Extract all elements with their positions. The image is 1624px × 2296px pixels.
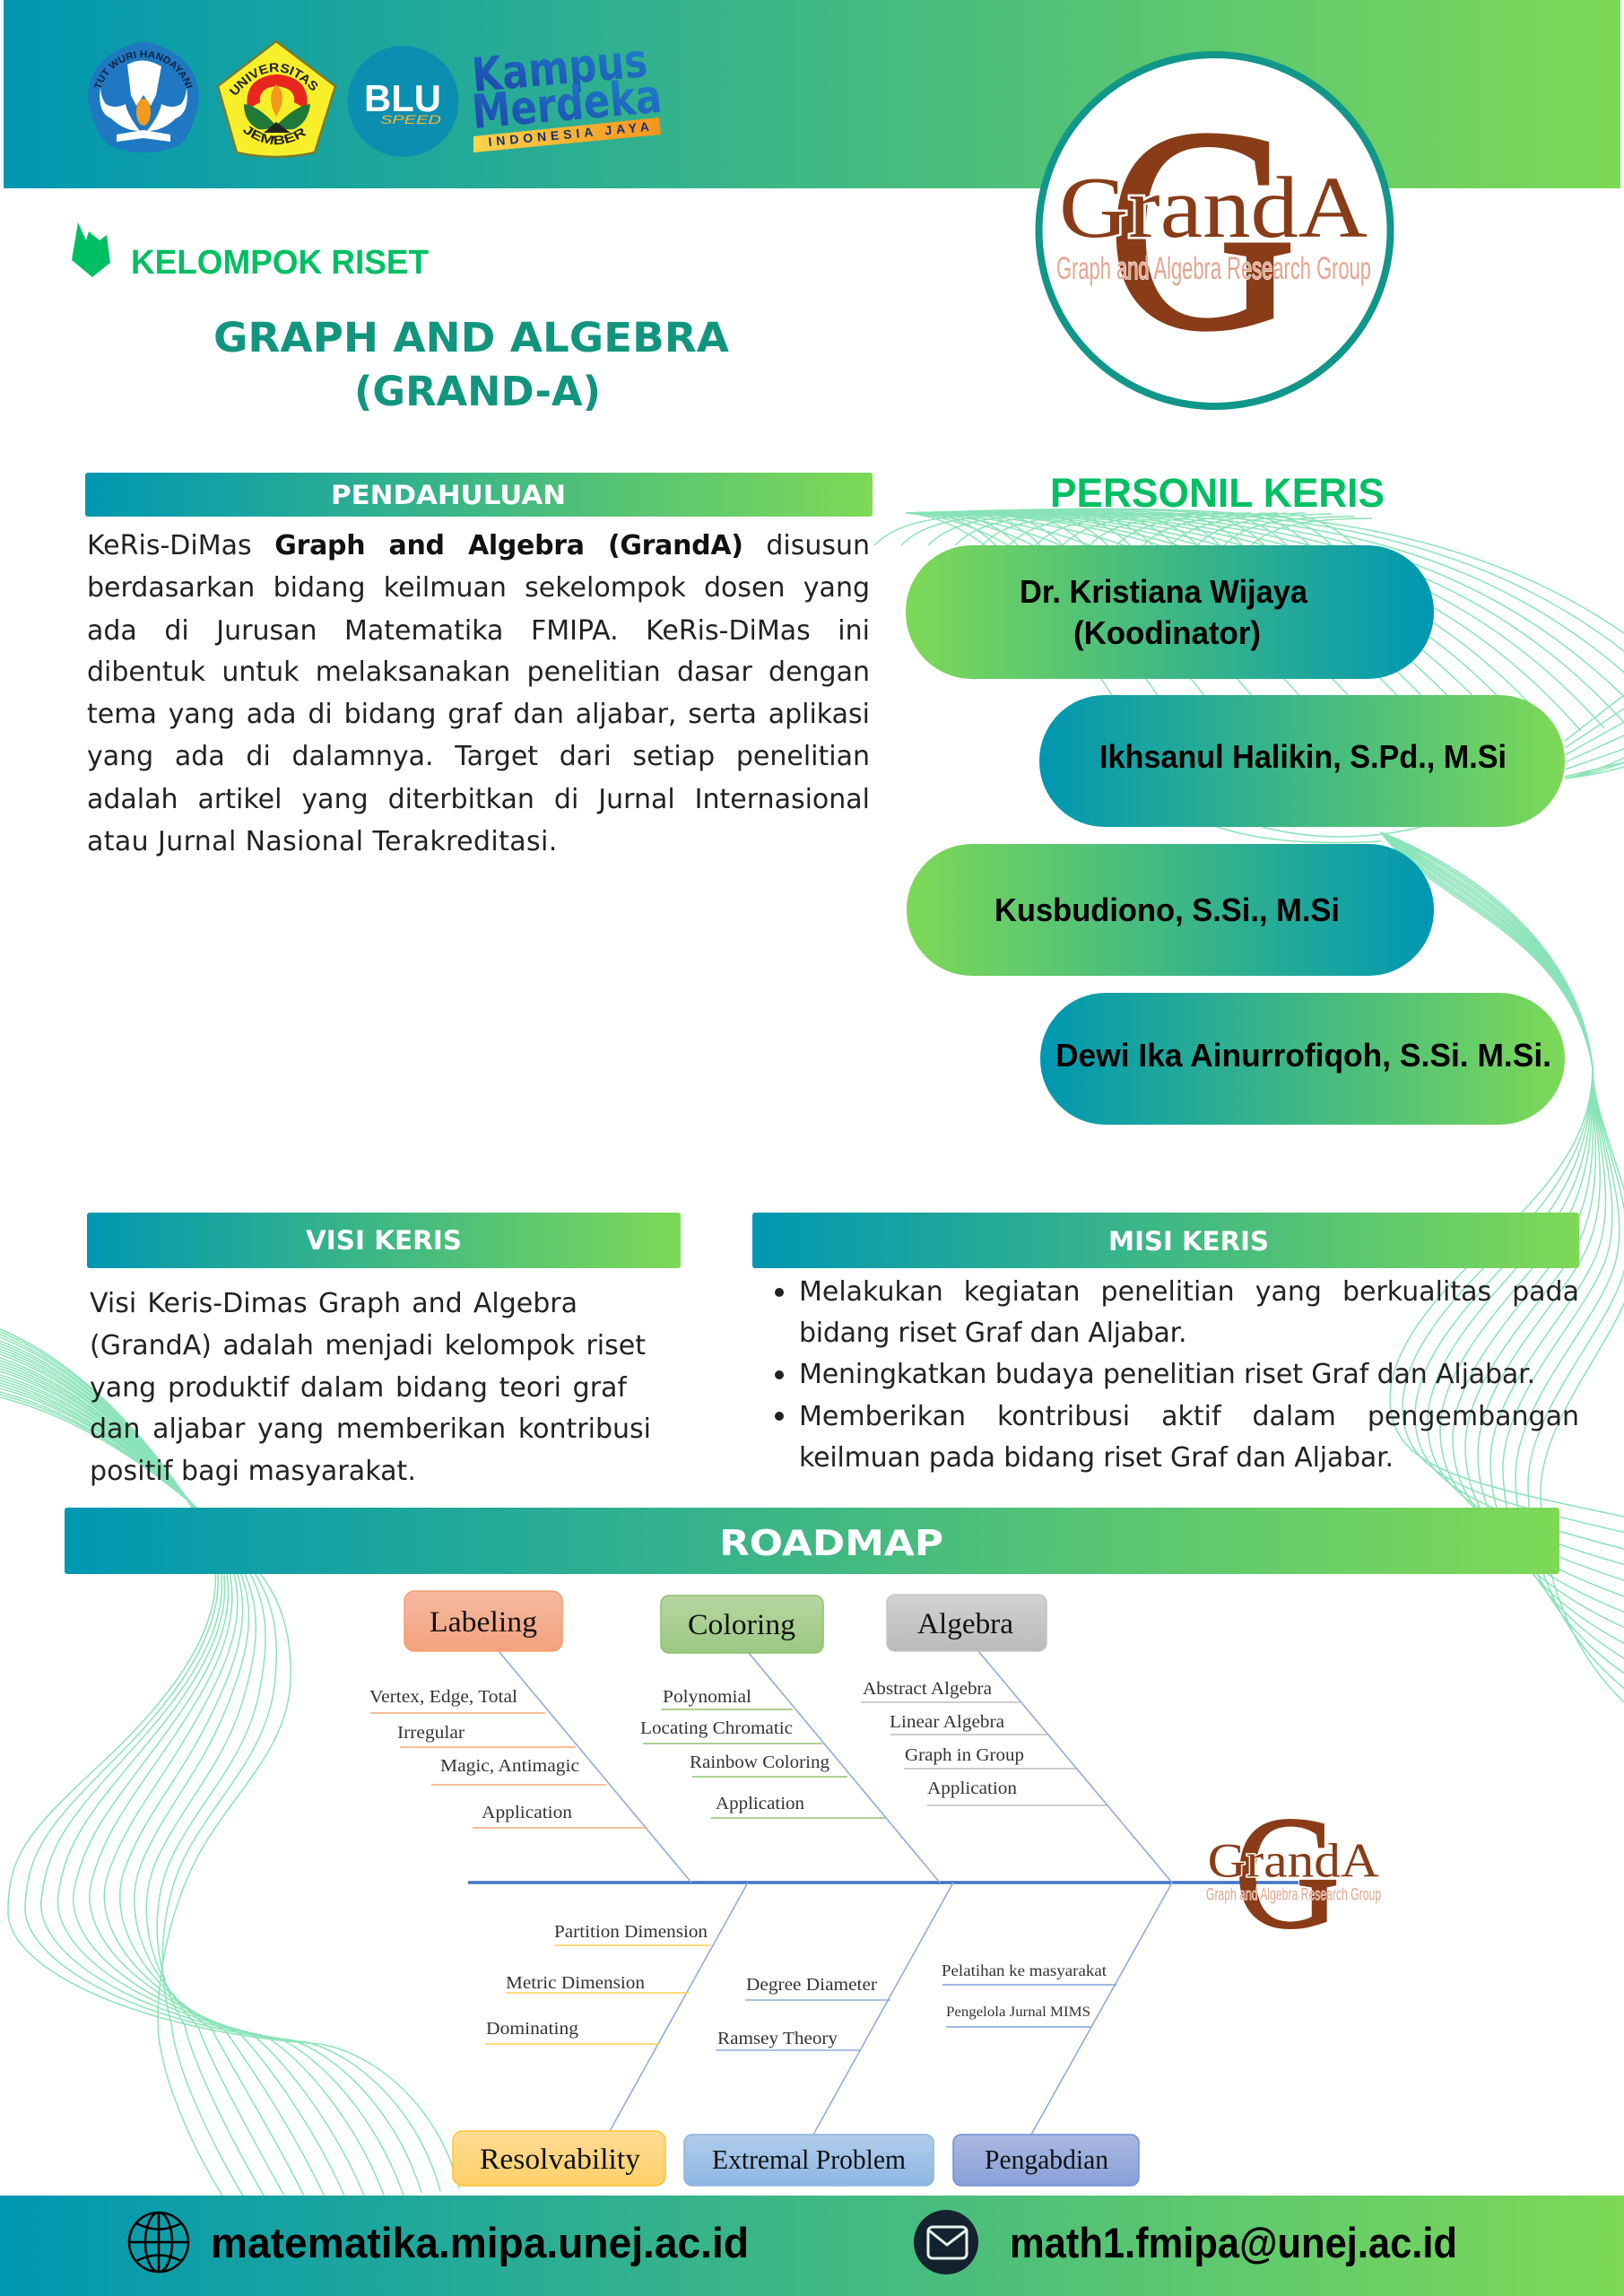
labeling branch: Magic, Antimagic — [440, 1756, 579, 1776]
heading bar: misi keris — [752, 1213, 1579, 1268]
decorative wave: right ribbon — [1381, 832, 1624, 1718]
text block: misi list: Meningkatkan budaya penelitian riset Graf dan Aljabar. — [799, 1359, 1535, 1390]
labeling branch — [369, 1591, 647, 1828]
icon: globe — [129, 2213, 188, 2272]
text block: pendahuluan: yang ada di dalamnya. Target dari setiap penelitian — [87, 741, 870, 772]
resolvability branch: Metric Dimension — [506, 1973, 645, 1993]
coloring branch: Polynomial — [663, 1687, 751, 1707]
logo: Tut Wuri Handayani — [88, 41, 199, 152]
logo: Kampus Merdeka: INDONESIA JAYA — [488, 119, 649, 149]
text block: misi list — [775, 1276, 1579, 1474]
heading bar: roadmap: ROADMAP — [719, 1524, 943, 1564]
logo: BLU Speed: SPEED — [380, 112, 441, 126]
decorative wave: left ribbon — [0, 1329, 459, 2215]
pengabdian branch: Pengelola Jurnal MIMS — [946, 2005, 1090, 2020]
resolvability branch: Dominating — [486, 2019, 578, 2039]
personnel pill: Kristiana Wijaya: (Koodinator) — [1073, 614, 1261, 651]
text block: pendahuluan: KeRis-DiMas Graph and Algebra (GrandA) disusun — [87, 530, 870, 561]
text block: misi list: bidang riset Graf dan Aljabar. — [799, 1318, 1186, 1349]
text block: visi: (GrandA) adalah menjadi kelompok riset — [90, 1330, 646, 1361]
logo: Universitas Jember — [217, 39, 337, 158]
title: GRAPH AND ALGEBRA — [213, 314, 729, 361]
heading bar: pendahuluan — [85, 473, 873, 517]
logo: Universitas Jember: JEMBER — [244, 126, 307, 145]
heading: personil keris: PERSONIL KERIS — [1050, 470, 1385, 516]
decorative wave: upper right ribbon — [874, 509, 1624, 843]
resolvability branch — [453, 1922, 710, 2186]
icon: green crystal — [72, 222, 110, 277]
personnel pill: Dewi Ika Ainurrofiqoh: Dewi Ika Ainurrofiqoh, S.Si. M.Si. — [1055, 1037, 1551, 1074]
text block: pendahuluan: dibentuk untuk melaksanakan penelitian dasar dengan — [87, 657, 870, 688]
footer bar — [0, 2196, 1624, 2296]
algebra branch: Application — [927, 1779, 1017, 1798]
text block: visi: positif bagi masyarakat. — [90, 1456, 416, 1487]
small GrandA logo: GrandA — [1208, 1832, 1379, 1887]
text block: visi: dan aljabar yang memberikan kontribusi — [90, 1413, 651, 1445]
extremal problem branch: Extremal Problem — [712, 2144, 906, 2175]
fishbone roadmap diagram — [369, 1591, 1381, 2186]
title: (GRAND-A) — [354, 368, 601, 415]
heading bar: visi keris: VISI KERIS — [306, 1225, 462, 1256]
heading bar: misi keris: MISI KERIS — [1108, 1226, 1269, 1257]
logo: GrandA in teal circle: Graph and Algebra Research Group — [1056, 251, 1371, 286]
algebra branch: Abstract Algebra — [863, 1679, 992, 1699]
small GrandA logo: G — [1234, 1783, 1341, 1962]
text block: misi list: Melakukan kegiatan penelitian yang berkualitas pada — [799, 1276, 1579, 1308]
personnel pill: Dewi Ika Ainurrofiqoh — [1040, 993, 1565, 1125]
logo: BLU Speed — [348, 46, 459, 157]
personnel pill: Ikhsanul Halikin: Ikhsanul Halikin, S.Pd., M.Si — [1099, 738, 1507, 775]
heading bar: visi keris — [87, 1213, 681, 1268]
resolvability branch: Resolvability — [480, 2144, 640, 2176]
text block: visi: yang produktif dalam bidang teori graf — [90, 1372, 627, 1404]
labeling branch: Vertex, Edge, Total — [369, 1687, 517, 1707]
pengabdian branch — [942, 1961, 1139, 2186]
coloring branch: Locating Chromatic — [640, 1718, 793, 1738]
small GrandA logo: Graph and Algebra Research Group — [1206, 1884, 1381, 1904]
text block: pendahuluan: berdasarkan bidang keilmuan sekelompok dosen yang — [87, 572, 870, 604]
logo: GrandA in teal circle — [1038, 55, 1390, 406]
labeling branch: Labeling — [430, 1606, 537, 1639]
footer website: matematika.mipa.unej.ac.id — [211, 2219, 749, 2266]
text block: pendahuluan — [87, 530, 870, 857]
resolvability branch: Partition Dimension — [554, 1922, 708, 1942]
coloring branch: Application — [716, 1794, 804, 1813]
personnel pill: Ikhsanul Halikin — [1039, 695, 1565, 827]
text block: pendahuluan: adalah artikel yang diterbitkan di Jurnal Internasional — [87, 784, 870, 815]
logo: Kampus Merdeka: Kampus — [470, 34, 649, 103]
logo: GrandA in teal circle: GrandA — [1059, 160, 1368, 257]
labeling branch: Application — [482, 1803, 572, 1822]
extremal problem branch: Degree Diameter — [746, 1975, 877, 1995]
icon: email envelope — [914, 2210, 978, 2274]
personnel pill: Kristiana Wijaya — [906, 545, 1434, 679]
algebra branch: Linear Algebra — [890, 1712, 1004, 1732]
pengabdian branch: Pengabdian — [985, 2144, 1108, 2175]
coloring branch: Rainbow Coloring — [690, 1752, 829, 1772]
algebra branch: Algebra — [917, 1608, 1013, 1640]
logo: Kampus Merdeka: Merdeka — [470, 70, 664, 140]
personnel pill: Kusbudiono: Kusbudiono, S.Si., M.Si — [994, 891, 1340, 928]
logo: Universitas Jember: UNIVERSITAS — [230, 63, 317, 95]
spine — [468, 1881, 1298, 1884]
extremal problem branch: Ramsey Theory — [717, 2029, 838, 2048]
algebra branch: Graph in Group — [905, 1745, 1024, 1765]
text block: misi list: keilmuan pada bidang riset Graf dan Aljabar. — [799, 1442, 1394, 1474]
text block: pendahuluan: atau Jurnal Nasional Terakreditasi. — [87, 826, 558, 857]
bones — [499, 1651, 1172, 2135]
text block: pendahuluan: ada di Jurusan Matematika FMIPA. KeRis-DiMas ini — [87, 615, 870, 647]
logo: Kampus Merdeka — [470, 34, 664, 152]
text block: misi list: Memberikan kontribusi aktif dalam pengembangan — [799, 1401, 1579, 1432]
heading bar: roadmap — [65, 1508, 1559, 1574]
title — [213, 314, 729, 415]
footer email: math1.fmipa@unej.ac.id — [1010, 2219, 1457, 2266]
algebra branch — [861, 1595, 1107, 1805]
header banner — [4, 0, 1620, 188]
personnel pill: Kusbudiono — [907, 844, 1434, 976]
heading bar: pendahuluan: PENDAHULUAN — [331, 480, 566, 510]
coloring branch: Coloring — [688, 1609, 795, 1641]
labeling branch: Irregular — [397, 1723, 465, 1743]
text block: visi: Visi Keris-Dimas Graph and Algebra — [90, 1288, 578, 1319]
personnel pill: Kristiana Wijaya: Dr. Kristiana Wijaya — [1020, 573, 1308, 610]
extremal problem branch — [684, 1975, 934, 2186]
text block: visi — [90, 1288, 651, 1487]
logo: Tut Wuri Handayani: TUT WURI HANDAYANI — [93, 50, 193, 89]
pengabdian branch: Pelatihan ke masyarakat — [942, 1961, 1107, 1979]
logo: GrandA in teal circle: G — [1107, 68, 1298, 391]
small GrandA logo — [1206, 1783, 1381, 1962]
heading: kelompok riset: KELOMPOK RISET — [131, 244, 429, 282]
coloring branch — [640, 1596, 886, 1818]
text block: pendahuluan: tema yang ada di bidang graf dan aljabar, serta aplikasi — [87, 699, 870, 730]
logo: BLU Speed: BLU — [364, 77, 441, 119]
